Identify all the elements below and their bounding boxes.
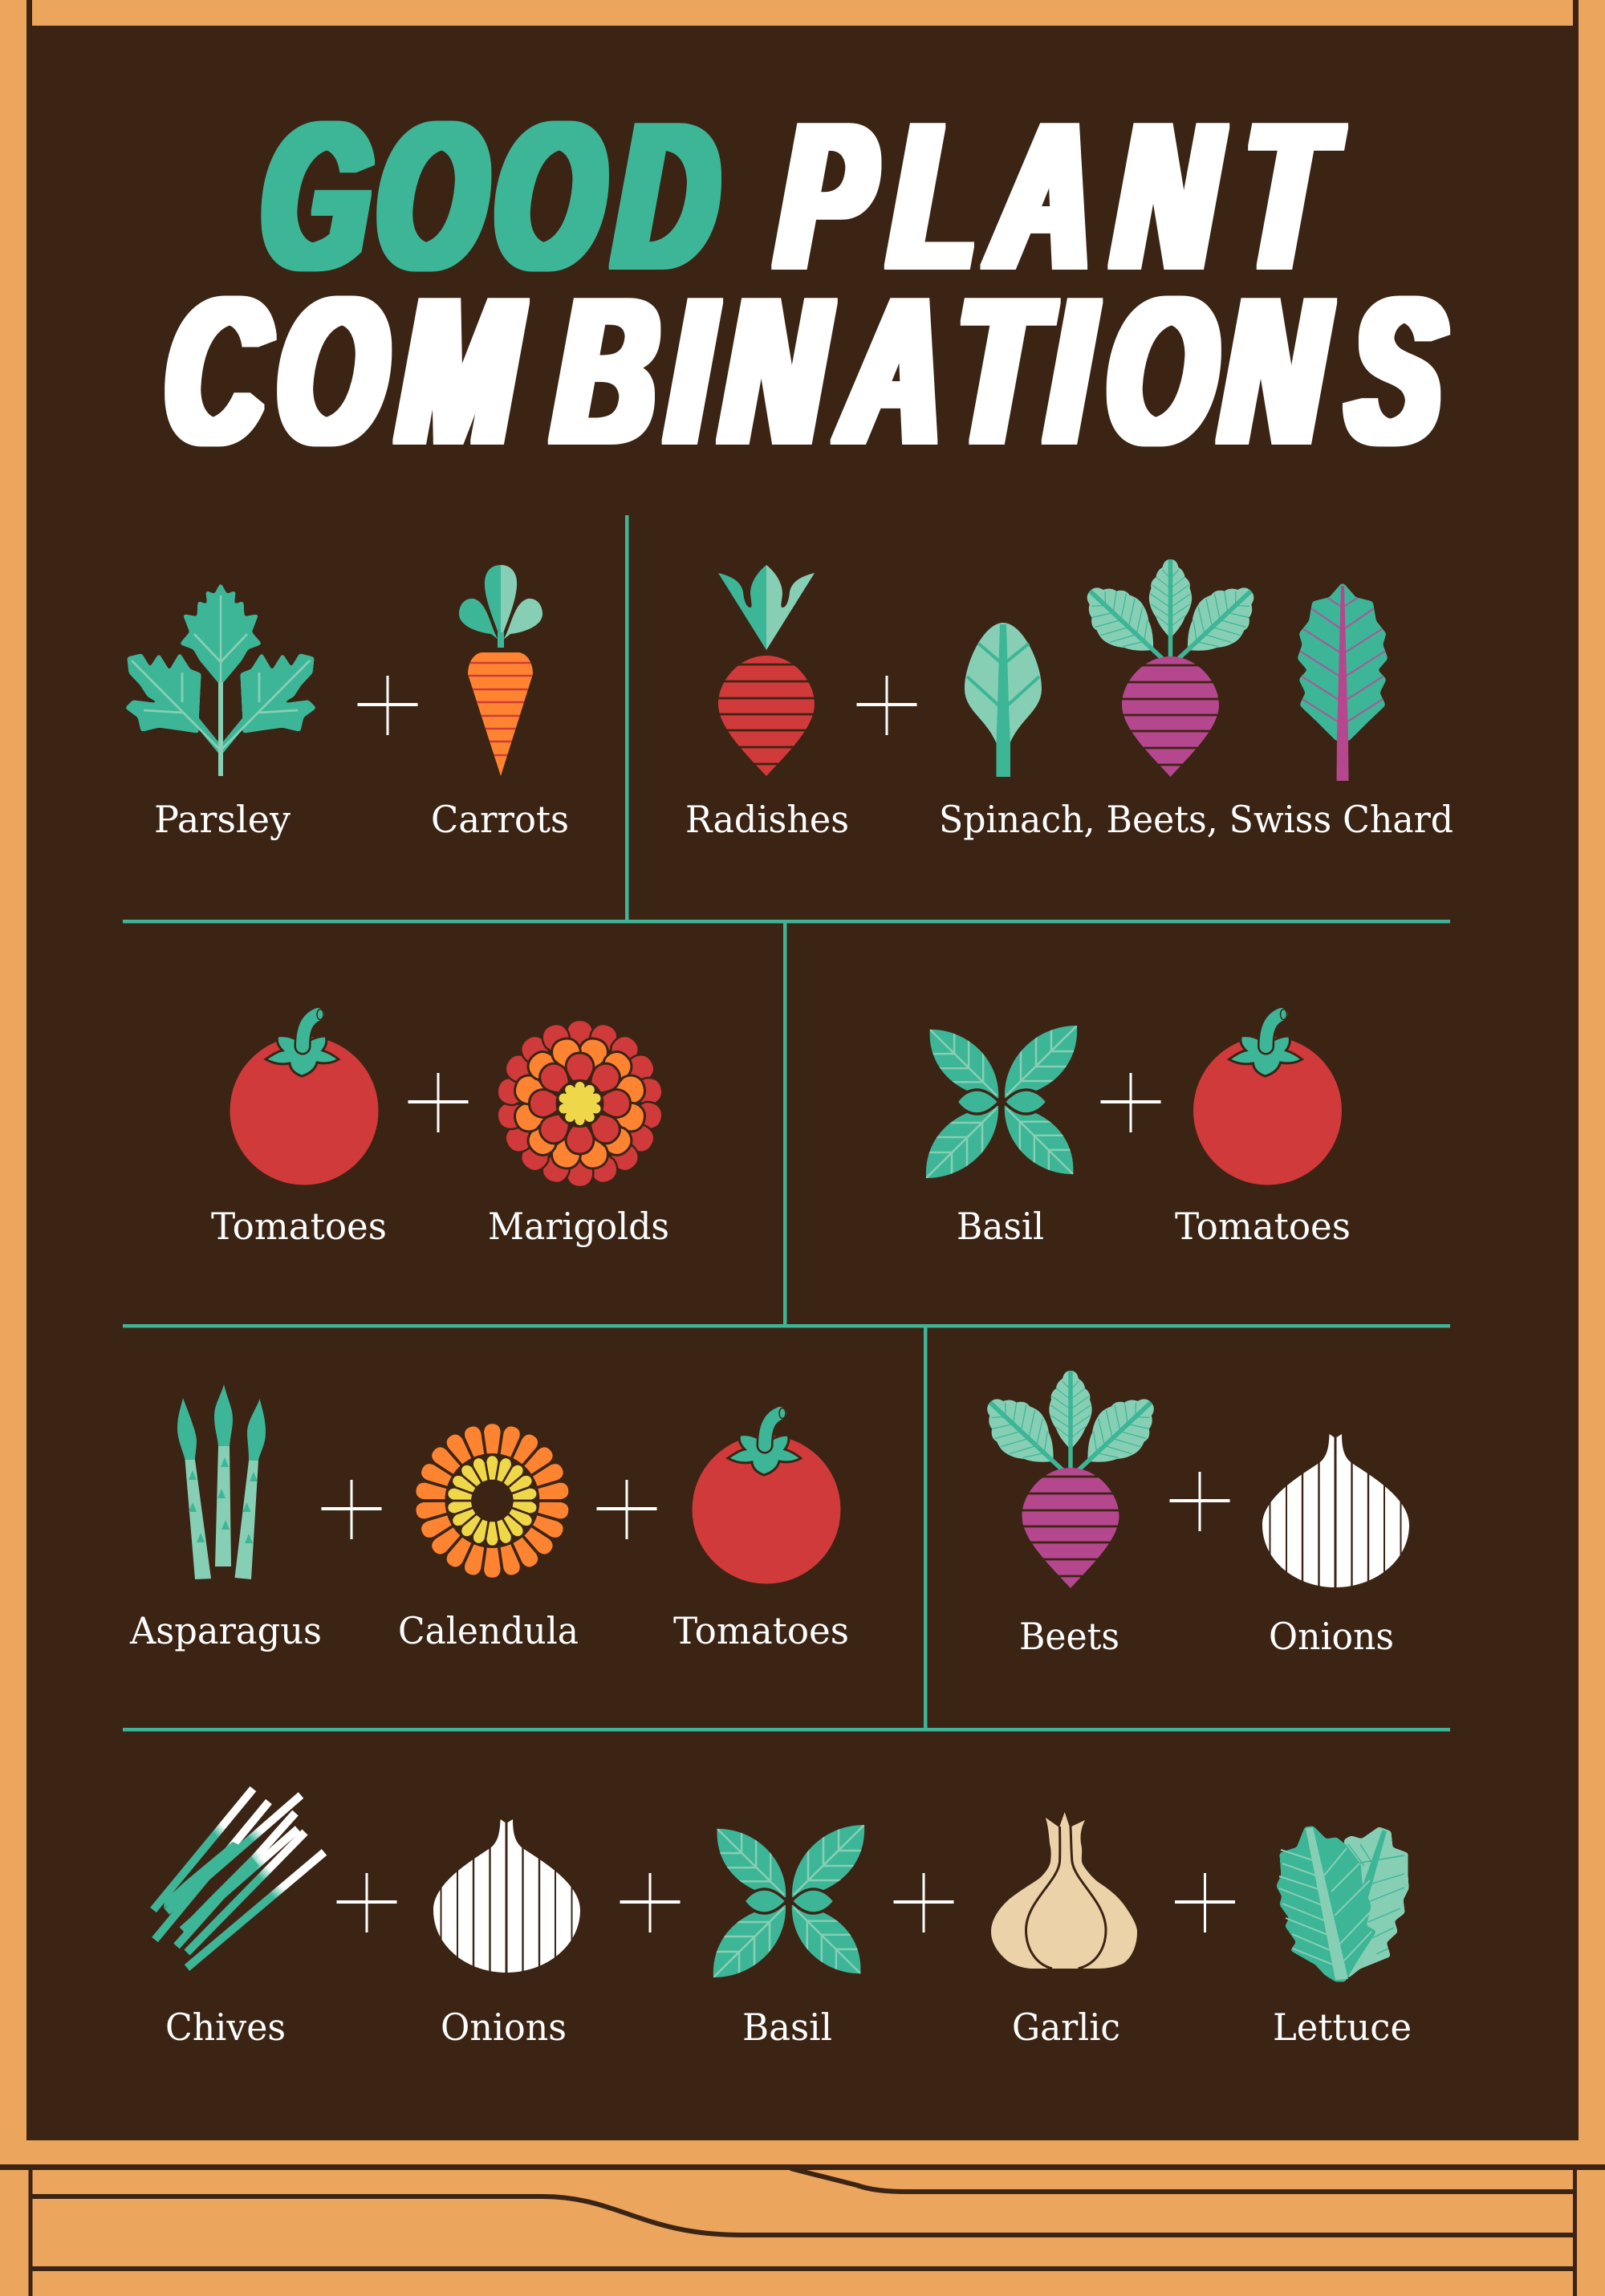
icon: asparagus bbox=[177, 1384, 266, 1579]
plus sign bbox=[337, 1873, 396, 1932]
label: Carrots: Carrots bbox=[431, 798, 569, 841]
label: Calendula: Calendula bbox=[398, 1609, 579, 1652]
icon: radish bbox=[713, 565, 820, 776]
label: Radishes: Radishes bbox=[685, 798, 849, 841]
plus sign bbox=[408, 1073, 469, 1132]
icon: lettuce bbox=[1278, 1827, 1408, 1981]
label: Chives: Chives bbox=[165, 2005, 286, 2049]
icon: beet bbox=[1071, 559, 1270, 777]
icon: swiss chard bbox=[1298, 586, 1387, 781]
plus sign bbox=[1175, 1873, 1235, 1932]
panel: chives + onions + basil + garlic + lettuce bbox=[153, 1789, 1412, 2049]
panel: tomatoes + marigolds bbox=[211, 1010, 669, 1248]
label: Garlic: Garlic bbox=[1012, 2005, 1120, 2049]
label: Beets: Beets bbox=[1019, 1615, 1119, 1658]
label: Lettuce: Lettuce bbox=[1273, 2005, 1412, 2049]
plus sign bbox=[1170, 1472, 1229, 1531]
title line: COMBINATIONS: COMBINATIONS bbox=[160, 257, 1448, 486]
icon: marigold bbox=[495, 1020, 664, 1187]
title bbox=[160, 82, 1448, 486]
plus sign bbox=[321, 1480, 382, 1539]
panel: beets + onions bbox=[972, 1371, 1409, 1658]
panel: basil + tomatoes bbox=[925, 1010, 1351, 1248]
icon: basil bbox=[925, 1026, 1078, 1178]
label: Marigolds: Marigolds bbox=[488, 1205, 669, 1248]
plus sign bbox=[857, 676, 916, 735]
title word: PLANT: PLANT bbox=[774, 82, 1343, 311]
label: Tomatoes: Tomatoes bbox=[211, 1205, 387, 1248]
label: Tomatoes: Tomatoes bbox=[1175, 1205, 1351, 1248]
icon: beet bbox=[972, 1371, 1169, 1588]
plus sign bbox=[597, 1480, 656, 1539]
icon: chives bbox=[153, 1789, 324, 1968]
icon: garlic bbox=[991, 1812, 1137, 1969]
icon: tomato bbox=[1193, 1010, 1342, 1185]
icon: parsley bbox=[127, 585, 315, 776]
icon: onion bbox=[433, 1819, 580, 1974]
panel: asparagus + calendula + tomatoes bbox=[129, 1384, 849, 1652]
plus sign bbox=[894, 1873, 953, 1932]
icon: spinach bbox=[965, 623, 1042, 777]
plus sign bbox=[620, 1873, 681, 1932]
label: Basil: Basil bbox=[742, 2005, 832, 2049]
icon: tomato bbox=[692, 1408, 841, 1584]
frame: top right post line bbox=[1573, 0, 1579, 27]
icon: carrot bbox=[459, 565, 542, 776]
frame: bottom wood planks bbox=[0, 2164, 1605, 2296]
label: Onions: Onions bbox=[441, 2005, 567, 2049]
icon: onion bbox=[1262, 1434, 1409, 1589]
plus sign bbox=[1101, 1073, 1160, 1132]
grid divider lines bbox=[123, 515, 1450, 1732]
label: Onions: Onions bbox=[1269, 1615, 1394, 1658]
label: Basil: Basil bbox=[957, 1205, 1044, 1248]
label: Parsley: Parsley bbox=[154, 798, 291, 841]
icon: basil bbox=[713, 1825, 865, 1977]
icon: tomato bbox=[230, 1010, 379, 1185]
frame: top left post line bbox=[26, 0, 32, 27]
label: Asparagus: Asparagus bbox=[129, 1609, 322, 1652]
title word: GOOD: GOOD bbox=[257, 82, 723, 311]
plus sign bbox=[358, 676, 417, 735]
panel: radishes + spinach, beets, swiss chard bbox=[685, 559, 1453, 841]
label: Tomatoes: Tomatoes bbox=[673, 1609, 849, 1652]
panel: parsley + carrots bbox=[127, 565, 569, 841]
label: Spinach, Beets, Swiss Chard: Spinach, Beets, Swiss Chard bbox=[939, 798, 1453, 841]
icon: calendula bbox=[414, 1423, 571, 1579]
